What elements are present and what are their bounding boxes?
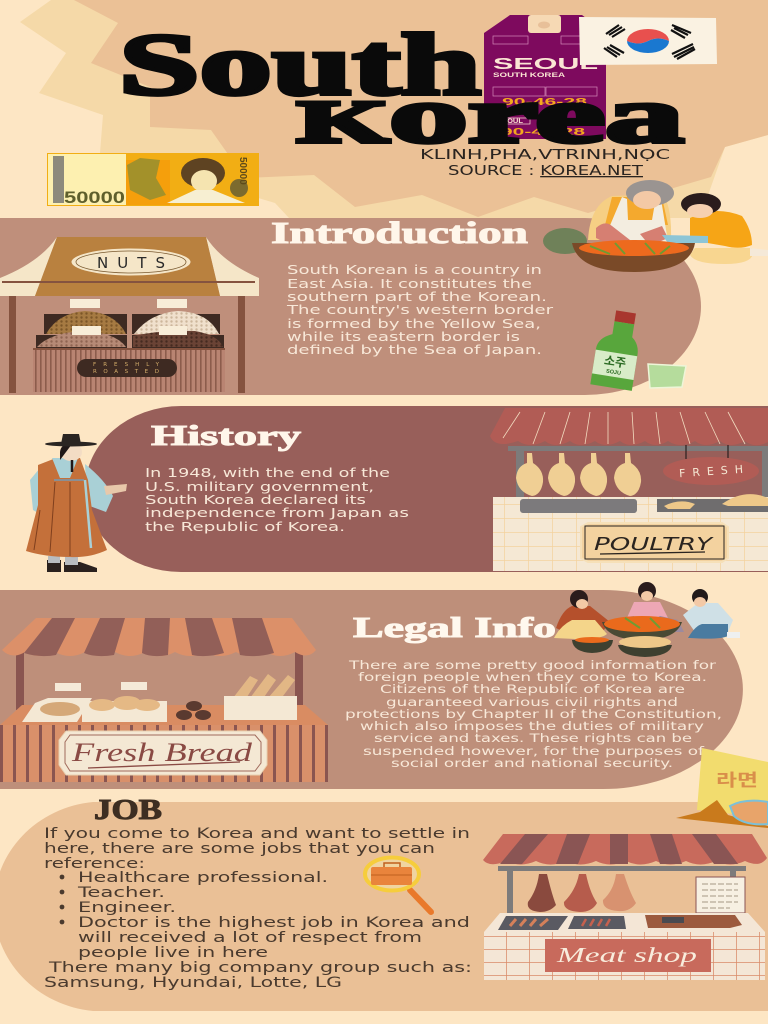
text block: job: Teacher. [76, 885, 165, 901]
luggage tag: SOUTH KOREA [493, 72, 565, 79]
text block: job: Healthcare professional. [78, 870, 328, 886]
text block: history: South Korea declared its [145, 492, 366, 507]
text block: legal info: service and taxes. These rights can be [374, 732, 692, 745]
luggage tag: SEOUL [493, 56, 598, 73]
text block: legal info: There are some pretty good information for [347, 659, 717, 672]
heading: job: JOB [94, 795, 162, 826]
banknote: 50000 won [47, 153, 259, 207]
illustration: ramen packet [676, 748, 768, 828]
text block: introduction: South Korean is a country in [287, 262, 542, 277]
text block: job: If you come to Korea and want to settle in [44, 826, 470, 842]
text block: history: In 1948, with the end of the [145, 465, 390, 480]
panel: legal info [0, 590, 743, 789]
heading: history: History [151, 420, 302, 452]
luggage tag: SEOUL [497, 119, 523, 125]
text block: introduction: East Asia. It constitutes the [287, 276, 532, 291]
illustration: soju bottle and glass: SOJU [606, 369, 621, 377]
illustration: nuts stall: NUTS [97, 254, 165, 272]
text block: legal info: suspended however, for the purposes of [363, 745, 706, 758]
text block: job: people live in here [78, 945, 268, 961]
illustration: man in hanbok [26, 434, 127, 572]
text block: legal info: protections by Chapter II of the Constitution, [345, 708, 722, 721]
authors and source [420, 148, 670, 179]
illustration: poultry stall: FRESH [679, 463, 743, 480]
text block: legal info: Citizens of the Republic of Korea are [380, 683, 685, 696]
text block: introduction: while its eastern border is [287, 329, 520, 344]
illustration: women making kimchi [543, 180, 768, 272]
text block: job: There many big company group such as: [48, 960, 472, 976]
illustration: nuts stall: FRESHLY [93, 362, 160, 368]
banknote: 50000 won: 50000 [64, 188, 125, 207]
text block: job: Engineer. [78, 900, 176, 916]
panel: history [85, 406, 768, 572]
text block: legal info: which also imposes the duties of military [360, 720, 705, 733]
text block: job [44, 826, 472, 991]
illustration: bread stall: Fresh Bread [71, 738, 253, 767]
text block: introduction: defined by the Sea of Japan. [287, 342, 542, 357]
heading: introduction: Introduction [271, 215, 528, 250]
panel: job [0, 802, 768, 1011]
illustration: poultry stall: POULTRY [594, 534, 715, 555]
illustration: ramen packet: 라면 [716, 771, 758, 790]
heading: legal info: Legal Info [353, 612, 556, 644]
authors and source: SOURCE : KOREA.NET [448, 164, 643, 179]
panel: introduction [0, 215, 701, 395]
banknote: 50000 won: 50000 [237, 157, 248, 185]
background: light burst [20, 0, 768, 218]
text block: legal info [345, 659, 722, 770]
text block: job: Samsung, Hyundai, Lotte, LG [44, 975, 342, 991]
illustration: poultry stall [490, 408, 768, 571]
text block: job: will received a lot of respect from [78, 930, 422, 946]
text block: introduction: The country's western border [286, 302, 554, 317]
text block: history: U.S. military government, [145, 479, 374, 494]
illustration: meat stall [483, 834, 767, 980]
chickens [516, 453, 641, 496]
text block: introduction [286, 262, 554, 357]
illustration: family sharing food [554, 582, 740, 657]
title: South Korea: K orea [297, 72, 684, 160]
illustration: bread stall [0, 618, 328, 782]
luggage tag: 90-46-28 [502, 97, 588, 108]
text block: introduction: southern part of the Korean. [287, 289, 547, 304]
title: South Korea [119, 17, 684, 160]
text block: introduction: is formed by the Yellow Sea, [287, 316, 541, 331]
luggage tag: 90-46-28 [501, 127, 586, 138]
illustration: nuts stall: ROASTED [93, 369, 159, 375]
text block: history: independence from Japan as [145, 505, 409, 520]
background: darker burst [74, 0, 768, 217]
luggage tag [484, 15, 606, 139]
illustration: meat stall: Meat shop [555, 943, 697, 967]
text block: legal info: guaranteed various civil rights and [386, 696, 678, 709]
authors and source: KLINH,PHA,VTRINH,NỌC [420, 148, 670, 163]
text block: legal info: social order and national security. [391, 757, 673, 770]
illustration: soju bottle and glass: 소주 [603, 353, 627, 370]
illustration: soju bottle and glass [590, 308, 686, 391]
text block: legal info: foreign people when they come to Korea. [358, 671, 707, 684]
title: South Korea: South [119, 17, 481, 114]
flag of South Korea [579, 17, 717, 65]
text block: history [145, 465, 409, 534]
text block: history: the Republic of Korea. [145, 519, 345, 534]
text block: job: reference: [44, 856, 145, 872]
illustration: nuts stall [0, 237, 259, 393]
icon: magnifier with briefcase [365, 858, 431, 912]
text block: job: here, there are some jobs that you can [44, 841, 435, 857]
text block: job: Doctor is the highest job in Korea and [78, 915, 470, 931]
